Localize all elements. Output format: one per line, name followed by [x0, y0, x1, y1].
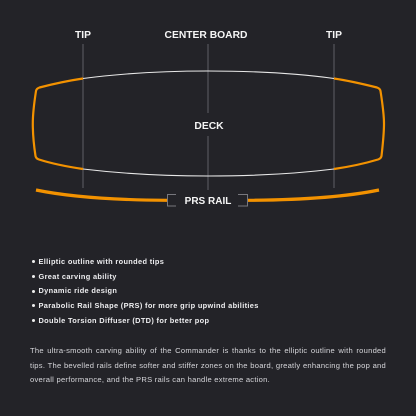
label: left tip: TIP: [75, 30, 91, 41]
tip guide line right: [333, 44, 335, 188]
paragraph line 1: The ultra-smooth carving ability of the Commander is thanks to the elliptic outline with rounded: [30, 346, 386, 355]
bullet: DTD: Double Torsion Diffuser (DTD) for better pop: [38, 316, 209, 324]
PRS rail right orange: [248, 190, 379, 200]
label: right tip: TIP: [326, 30, 342, 41]
center board guide line: [207, 44, 209, 190]
label: deck: DECK: [194, 121, 224, 132]
orange right tip outline: [334, 78, 384, 169]
label: PRS rail: PRS RAIL: [185, 196, 231, 207]
deck outline centre white top: [83, 71, 334, 78]
paragraph line 3: overall performance, and the PRS rails can handle extreme action.: [30, 375, 270, 384]
PRS rail left bracket: [168, 194, 176, 206]
orange left tip outline: [33, 78, 83, 169]
deck outline centre white bottom: [83, 169, 334, 176]
tip guide line left: [82, 44, 84, 188]
description paragraph: [30, 346, 386, 384]
bullet: elliptic outline: Elliptic outline with rounded tips: [38, 256, 164, 266]
bullet: carving: Great carving ability: [38, 272, 117, 280]
PRS rail left orange: [36, 190, 167, 200]
bullet: dynamic: Dynamic ride design: [38, 286, 117, 295]
bullet: PRS: Parabolic Rail Shape (PRS) for more grip upwind abilities: [38, 300, 259, 310]
label: center board: CENTER BOARD: [165, 30, 247, 41]
feature list: [32, 256, 259, 324]
paragraph line 2: tips. The bevelled rails define softer and stiffer zones on the board, greatly enhancing the pop and: [30, 360, 386, 370]
PRS rail right bracket: [238, 194, 248, 206]
